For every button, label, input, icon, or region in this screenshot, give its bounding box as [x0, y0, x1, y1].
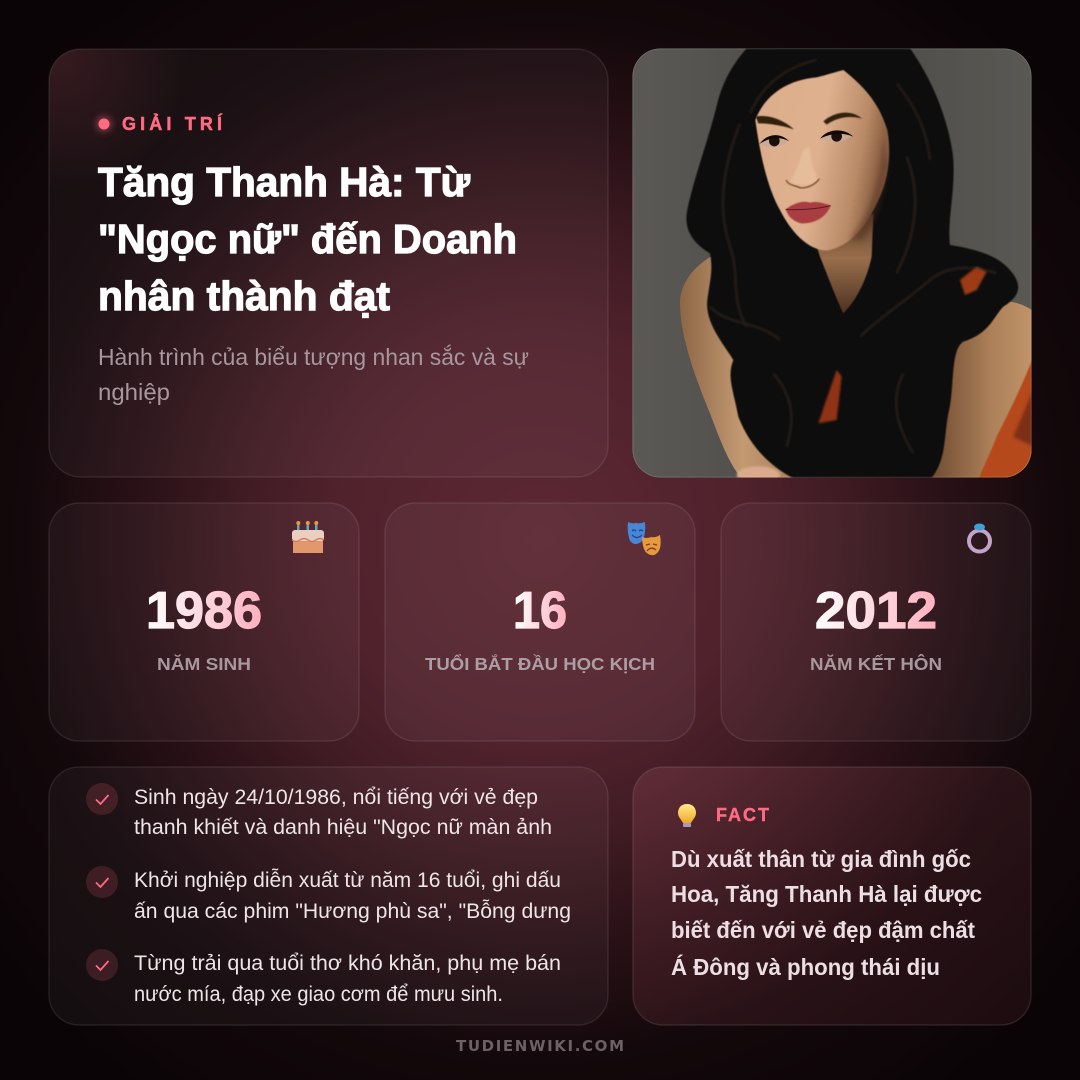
- list item 2: [86, 866, 571, 923]
- stat value: 2012: [815, 582, 937, 640]
- subtitle: Hành trình của biểu tượng nhan sắc và sự: [98, 344, 529, 370]
- fact text: Hoa, Tăng Thanh Hà lại được: [671, 881, 982, 907]
- list item 3: Từng trải qua tuổi thơ khó khăn, phụ mẹ bán: [134, 952, 561, 975]
- title: "Ngọc nữ" đến Doanh: [98, 216, 517, 262]
- list item 3: [86, 949, 561, 1006]
- subtitle: [98, 344, 529, 405]
- panel: title card: [49, 49, 608, 477]
- eyebrows: [756, 116, 794, 129]
- face: [755, 70, 889, 251]
- stat value: 16: [513, 582, 567, 640]
- panel: stat birth year: [49, 503, 359, 741]
- face shadow: [850, 140, 888, 240]
- shoulders and arms: [680, 256, 793, 478]
- stat label: NĂM KẾT HÔN: [810, 653, 942, 674]
- eyes: [761, 138, 787, 148]
- icon: ring: [969, 524, 990, 552]
- hand: [735, 466, 780, 478]
- fact text: Á Đông và phong thái dịu: [671, 953, 940, 980]
- icon: birthday cake: [292, 521, 324, 553]
- neck and chest: [817, 213, 873, 313]
- hair highlights: [710, 60, 997, 453]
- icon: light bulb: [678, 804, 696, 827]
- category tag: GIẢI TRÍ: [122, 113, 223, 134]
- panel: stat wedding year: [721, 503, 1031, 741]
- title: nhân thành đạt: [98, 273, 390, 319]
- fact text: Dù xuất thân từ gia đình gốc: [671, 846, 971, 872]
- panel: fact: [633, 767, 1031, 1025]
- title: [98, 159, 517, 319]
- stat value: 1986: [146, 582, 262, 640]
- panel: stat acting start age: [385, 503, 695, 741]
- list item 1: [86, 783, 552, 839]
- list item 2: ấn qua các phim "Hương phù sa", "Bỗng dưng: [134, 900, 571, 923]
- panel: key points list: [49, 767, 608, 1025]
- icon: theater masks: [628, 522, 661, 555]
- footer watermark: TUDIENWIKI.COM: [456, 1037, 624, 1055]
- subtitle: nghiệp: [98, 379, 170, 405]
- panel: portrait photo: [632, 48, 1033, 484]
- nose: [791, 148, 818, 185]
- fact label: FACT: [716, 805, 769, 825]
- list item 1: thanh khiết và danh hiệu "Ngọc nữ màn ảnh: [134, 816, 552, 839]
- fact text: [671, 846, 982, 980]
- hair mass: [686, 48, 1018, 480]
- title: Tăng Thanh Hà: Từ: [98, 159, 470, 205]
- dress lower right: [978, 357, 1033, 480]
- fact text: biết đến với vẻ đẹp đậm chất: [671, 917, 975, 943]
- list item 1: Sinh ngày 24/10/1986, nổi tiếng với vẻ đẹp: [134, 786, 538, 809]
- lips: [786, 202, 831, 223]
- stat label: NĂM SINH: [157, 653, 251, 674]
- list item 2: Khởi nghiệp diễn xuất từ năm 16 tuổi, ghi dấu: [134, 869, 561, 892]
- stat label: TUỔI BẮT ĐẦU HỌC KỊCH: [425, 653, 655, 674]
- list item 3: nước mía, đạp xe giao cơm để mưu sinh.: [134, 983, 503, 1006]
- dress pieces over hair: [960, 267, 987, 295]
